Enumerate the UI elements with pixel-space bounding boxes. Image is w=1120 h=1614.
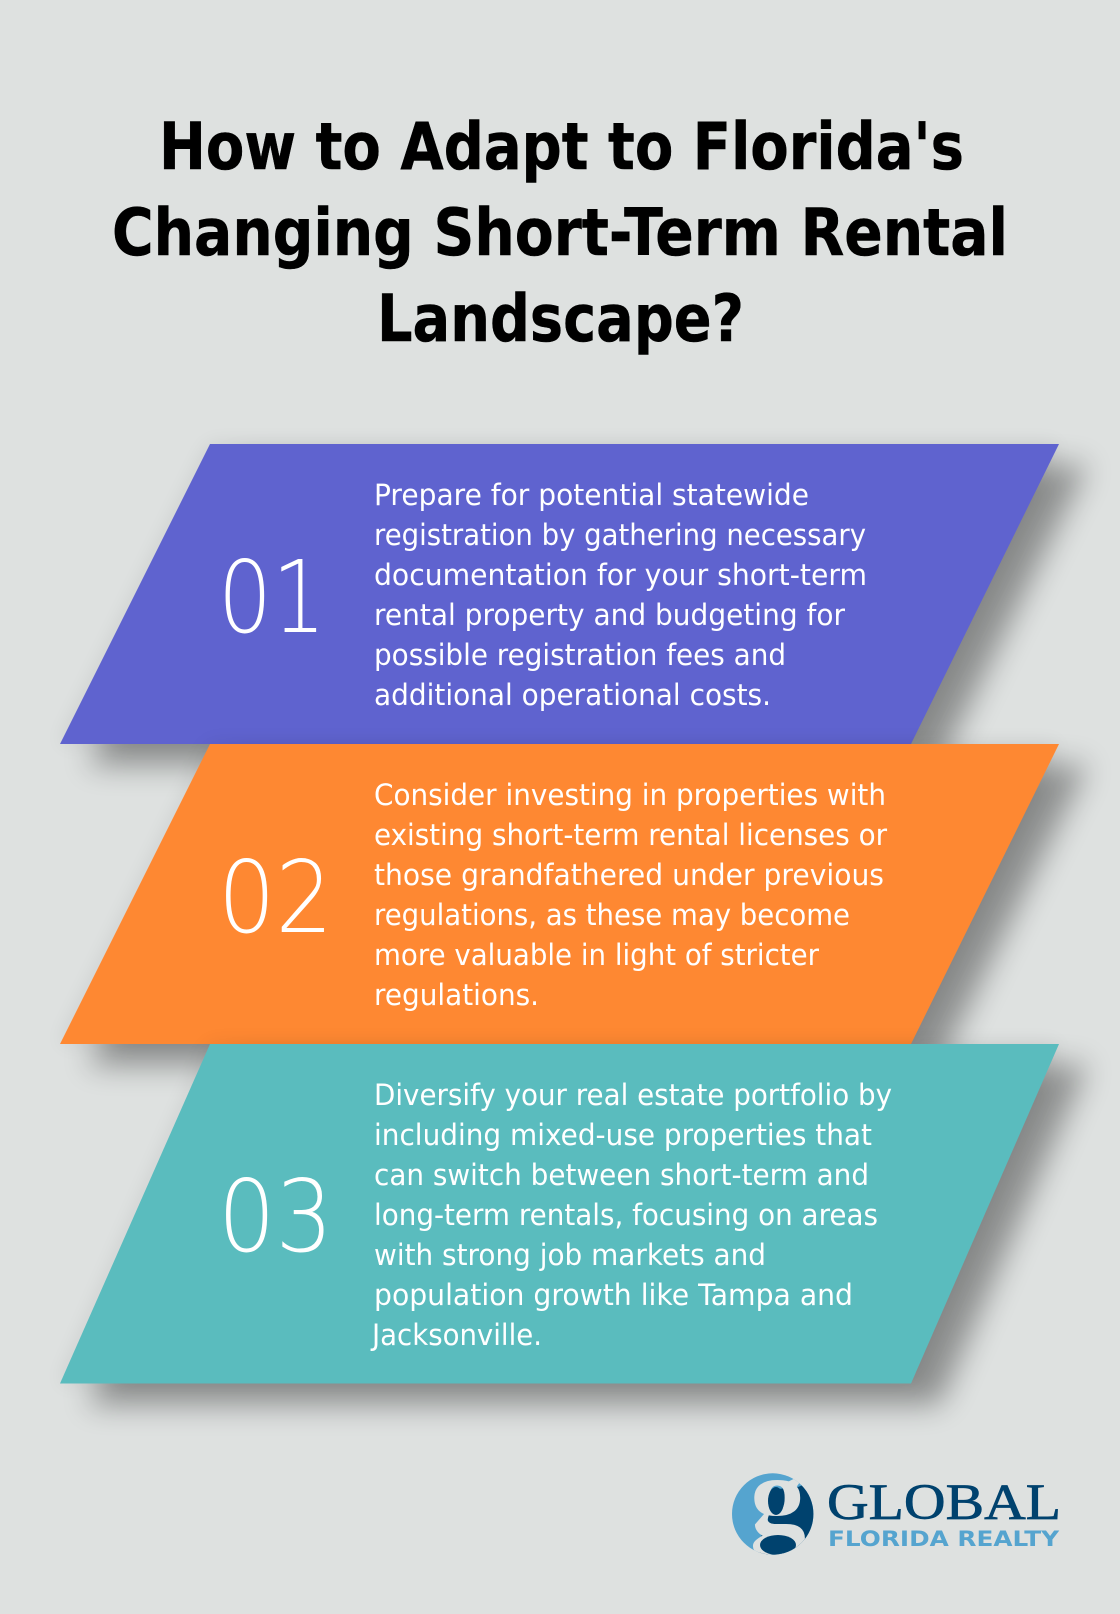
text: step 02 description: regulations, as these may become bbox=[374, 898, 850, 932]
number 03: 03 bbox=[218, 1158, 333, 1275]
title bbox=[112, 110, 1008, 357]
number 01: 01 bbox=[218, 539, 326, 656]
text: step 01 description: possible registration fees and bbox=[374, 638, 786, 672]
text: step 03 description: population growth like Tampa and bbox=[374, 1278, 853, 1312]
text: step 01 description: rental property and budgeting for bbox=[374, 598, 845, 632]
text: step 01 description: Prepare for potential statewide bbox=[374, 478, 809, 512]
title: How to Adapt to Florida's bbox=[159, 110, 964, 185]
text: step 03 description: Diversify your real estate portfolio by bbox=[374, 1078, 892, 1112]
text: step 02 description: Consider investing in properties with bbox=[374, 778, 886, 812]
parallelogram: step 02 background bbox=[60, 744, 1059, 1044]
text: step 03 description: can switch between short-term and bbox=[374, 1158, 869, 1192]
panel: step 01 bbox=[60, 444, 1059, 744]
panel: step 02 bbox=[60, 744, 1059, 1044]
title: Changing Short-Term Rental bbox=[112, 196, 1008, 271]
text: step 02 description: more valuable in light of stricter bbox=[374, 938, 819, 972]
text: step 01 description: additional operational costs. bbox=[374, 678, 771, 712]
text: step 01 description: documentation for your short-term bbox=[374, 558, 867, 592]
text: step 03 description: long-term rentals, focusing on areas bbox=[374, 1198, 878, 1232]
text: step 03 description bbox=[370, 1078, 892, 1352]
text: step 01 description bbox=[374, 478, 867, 712]
text: step 02 description: existing short-term rental licenses or bbox=[374, 818, 887, 852]
wordmark: FLORIDA REALTY: FLORIDA REALTY bbox=[828, 1527, 1059, 1552]
parallelogram: step 03 background bbox=[60, 1044, 1059, 1384]
icon: g badge: g bbox=[750, 1434, 806, 1558]
logo: Global Florida Realty bbox=[732, 1473, 1060, 1555]
text: step 03 description: Jacksonville. bbox=[370, 1318, 542, 1352]
text: step 02 description: those grandfathered under previous bbox=[374, 858, 884, 892]
number 02: 02 bbox=[218, 839, 333, 956]
text: step 02 description bbox=[374, 778, 887, 1012]
text: step 02 description: regulations. bbox=[374, 978, 539, 1012]
text: step 03 description: including mixed-use properties that bbox=[374, 1118, 872, 1152]
panel: step 03 bbox=[60, 1044, 1059, 1384]
wordmark: GLOBAL: GLOBAL bbox=[827, 1475, 1061, 1531]
text: step 03 description: with strong job markets and bbox=[374, 1238, 766, 1272]
text: step 01 description: registration by gathering necessary bbox=[374, 518, 866, 552]
parallelogram: step 01 background bbox=[60, 444, 1059, 744]
title: Landscape? bbox=[377, 282, 744, 357]
icon: g badge bbox=[732, 1473, 814, 1555]
